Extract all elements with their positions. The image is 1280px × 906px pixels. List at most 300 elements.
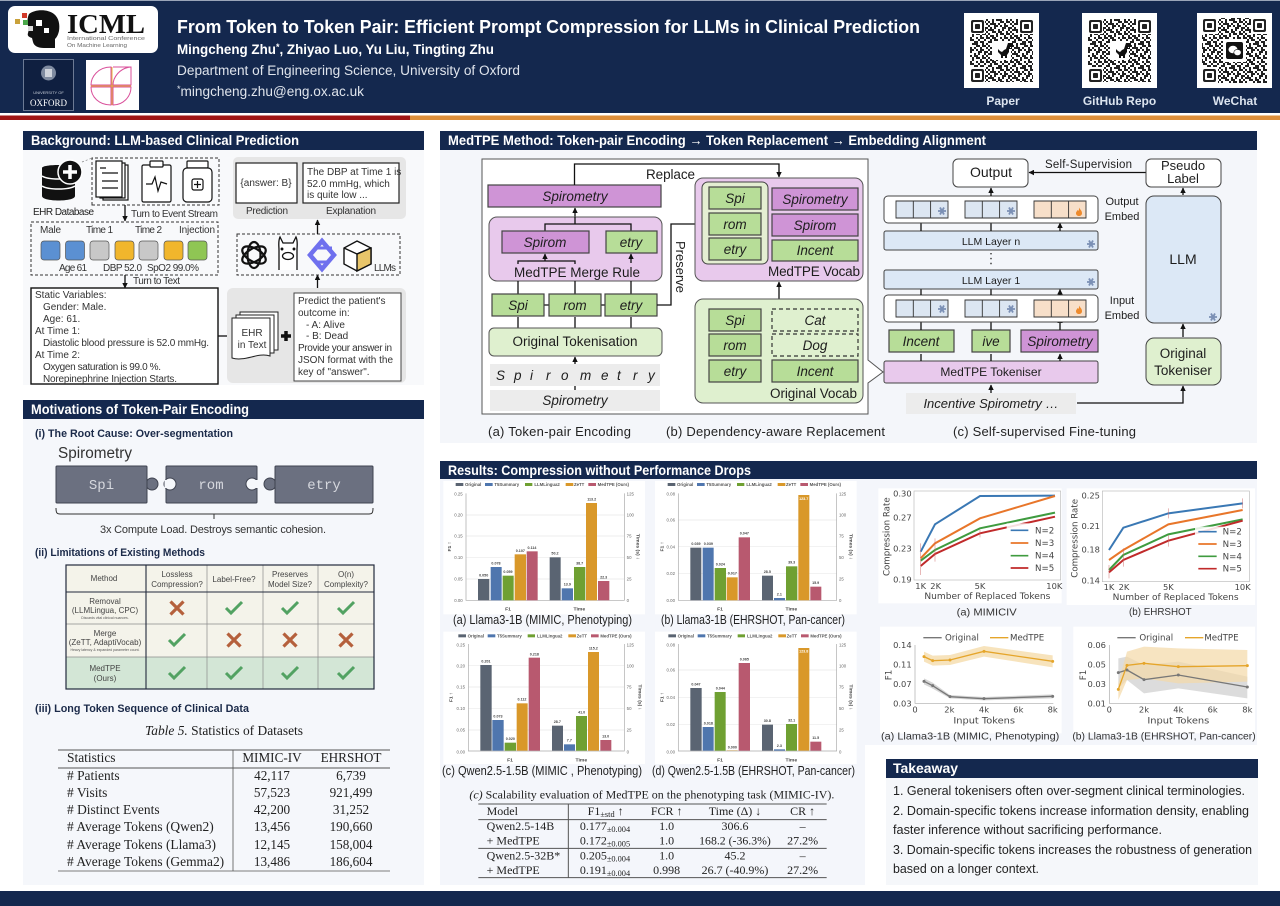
- panel: takeaway: [886, 759, 1258, 885]
- email: mingcheng.zhu@eng.ox.ac.uk: [181, 84, 364, 99]
- puzzle tokens: etry: [307, 478, 341, 494]
- event stream: Time 2: [135, 225, 162, 236]
- logo: University of Oxford: [24, 60, 74, 110]
- bar chart: Qwen EHRSHOT: 0.000: [728, 746, 737, 750]
- bar chart: Llama3 EHRSHOT: 2.1: [777, 592, 782, 596]
- bar chart: Llama3 EHRSHOT: F1: [717, 607, 723, 613]
- LLM layer 1: [884, 270, 1098, 289]
- dataset statistics table: 190,660: [330, 819, 373, 834]
- dataset statistics table: 12,145: [254, 837, 291, 852]
- block: original vocab: Dog: [803, 338, 828, 353]
- heading: method: [440, 131, 1257, 150]
- scalability table: 27.2%: [787, 863, 818, 877]
- block: original vocab: [695, 299, 863, 403]
- block: MedTPE vocab: MedTPE Vocab: [768, 264, 860, 279]
- puzzle tokens: [56, 466, 373, 503]
- line chart: compression rate EHRSHOT: 0.21: [1081, 521, 1100, 531]
- arrow: replace: Replace: [646, 167, 695, 182]
- line chart: compression rate MIMIC-IV: 0.23: [893, 544, 912, 554]
- heading: results: Results: Compression without Performance Drops: [448, 462, 751, 478]
- bar chart: Llama3 MIMIC: 125: [627, 492, 634, 497]
- line chart: compression rate MIMIC-IV: [878, 488, 1063, 619]
- arrow: prompt to LLMs: [316, 275, 318, 288]
- bar chart: Llama3 MIMIC: 0.00: [454, 598, 463, 603]
- legend: T5Summary: [497, 633, 522, 638]
- scalability table: + MedTPE: [487, 833, 540, 847]
- token connectors: [518, 281, 631, 305]
- token row: Spi: [508, 298, 529, 313]
- bar chart: Llama3 EHRSHOT: 39.3: [788, 561, 795, 565]
- legend: LLMLingua2: [747, 633, 773, 638]
- word: Spirometry: Spirometry: [58, 445, 132, 462]
- bar chart: Llama3 EHRSHOT: 0: [839, 598, 842, 603]
- legend: LLMLingua2: [534, 482, 560, 487]
- bar chart: Qwen MIMIC: 0.201: [481, 660, 491, 664]
- bar chart: Llama3 MIMIC: 0.114: [528, 546, 537, 550]
- heading: background: [23, 131, 424, 150]
- scalability table: 0.998: [653, 863, 680, 877]
- legend: Original: [1139, 634, 1173, 644]
- caption: chart d: (d) Qwen2.5-1.5B (EHRSHOT, Pan-cancer): [652, 763, 855, 778]
- LLM block: LLM: [1169, 251, 1197, 267]
- heading: takeaway: [886, 759, 1258, 778]
- line chart: compression rate MIMIC-IV: (a) MIMICIV: [957, 608, 1017, 619]
- bar chart: Qwen MIMIC: 0.020: [506, 737, 515, 741]
- comparison table: Complexity?: [324, 580, 369, 589]
- event stream: Age 61: [59, 263, 87, 274]
- scalability table: ±0.004: [607, 825, 631, 834]
- bar chart: Qwen EHRSHOT: Times (s) ↓: [847, 684, 853, 710]
- line chart: compression rate MIMIC-IV: 10K: [1046, 581, 1063, 591]
- bar chart: Qwen EHRSHOT: 30.8: [764, 719, 771, 723]
- bar chart: Qwen EHRSHOT: 0.08: [667, 642, 676, 647]
- caption: chart a: (a) Llama3-1B (MIMIC, Phenotyping): [453, 612, 632, 627]
- captions: (a) Token-pair Encoding: [488, 424, 631, 439]
- arrow: self-supervision: Self-Supervision: [1045, 159, 1132, 171]
- line chart: F1 Llama3 MIMIC: Input Tokens: [953, 716, 1016, 726]
- legend: ZeTT: [787, 633, 797, 638]
- legend: ZeTT: [786, 482, 797, 487]
- line chart: F1 Llama3 MIMIC: [880, 627, 1062, 742]
- scalability table: Qwen2.5-32B*: [487, 848, 560, 862]
- brace caption: 3x Compute Load. Destroys semantic cohesion.: [100, 524, 326, 536]
- line chart: F1 Llama3 MIMIC: 2k: [944, 705, 955, 715]
- bar chart: Qwen EHRSHOT: 0.065: [740, 658, 749, 662]
- bar chart: Llama3 EHRSHOT: 0.047: [740, 532, 749, 536]
- character strip: [490, 364, 660, 386]
- legend: [1195, 527, 1245, 575]
- original tokeniser: [1146, 338, 1221, 385]
- block: MedTPE vocab: etry: [724, 242, 747, 257]
- frame: encoding and replacement: [482, 159, 883, 414]
- arrow: turn to event stream: Turn to Event Stream: [131, 209, 218, 220]
- output panel: [233, 157, 406, 219]
- prediction box: [236, 163, 297, 217]
- scalability table: 27.2%: [787, 833, 818, 847]
- scalability table: ±0.004: [607, 854, 631, 863]
- icon: EHR in text document: EHR: [241, 328, 263, 339]
- line chart: F1 Llama3 MIMIC: 4k: [979, 705, 989, 715]
- bar chart: Llama3 MIMIC: 0.15: [454, 534, 463, 539]
- icon: EHR database: [33, 160, 94, 218]
- dataset statistics table: # Patients: [67, 768, 120, 783]
- original tokenisation: Original Tokenisation: [512, 334, 638, 349]
- comparison table: (ZeTT, AdaptiVocab): [69, 638, 142, 647]
- block: MedTPE vocab: Spirometry: [782, 192, 849, 207]
- bar chart: Llama3 EHRSHOT: 0.06: [667, 518, 676, 523]
- line chart: compression rate EHRSHOT: 0.25: [1081, 490, 1100, 500]
- arrow: replace: [574, 164, 779, 185]
- bar chart: Qwen EHRSHOT: 0.00: [667, 749, 676, 754]
- bar chart: Qwen MIMIC: 0.112: [518, 698, 526, 702]
- brace: [56, 508, 373, 519]
- block: original vocab: Incent: [797, 364, 835, 379]
- event stream: Male: [40, 225, 61, 236]
- scalability table: CR ↑: [790, 804, 815, 818]
- captions: (b) Dependency-aware Replacement: [666, 424, 885, 439]
- line chart: F1 Llama3 EHRSHOT: [1072, 627, 1256, 742]
- heading: background: Background: LLM-based Clinical Prediction: [31, 132, 299, 148]
- QR labels: Paper: [986, 94, 1020, 108]
- legend: MedTPE (Ours): [600, 633, 632, 638]
- legend: T5Summary: [494, 482, 520, 487]
- bar chart: Llama3 MIMIC: F1 ↑: [447, 542, 453, 552]
- dataset statistics table: 158,004: [330, 837, 373, 852]
- line chart: F1 Llama3 MIMIC: 6k: [1013, 705, 1024, 715]
- EHR text box: At Time 1:: [35, 326, 80, 337]
- line chart: F1 Llama3 MIMIC: 0.11: [893, 659, 912, 669]
- bar chart: Qwen EHRSHOT: F1 ↑: [659, 692, 665, 702]
- bar chart: Llama3 EHRSHOT: Time: [786, 607, 797, 613]
- comparison table: (LLMLingua, CPC): [72, 606, 138, 615]
- scalability table: [469, 788, 834, 878]
- line chart: F1 Llama3 EHRSHOT: 4k: [1173, 705, 1184, 715]
- arrow: turn to text: Turn to Text: [133, 276, 180, 287]
- tokeniser tokens: [889, 330, 1098, 352]
- arrow: text to prompt: [218, 335, 232, 337]
- logo: ICML: On Machine Learning: [67, 43, 127, 49]
- bar chart: Qwen MIMIC: 41.0: [578, 710, 585, 714]
- dataset statistics table: 13,456: [254, 819, 291, 834]
- bar chart: Llama3 EHRSHOT: 0.08: [667, 492, 676, 497]
- bar chart: Llama3 EHRSHOT: 123.7: [799, 497, 808, 501]
- prompt box: Predict the patient's: [298, 296, 386, 307]
- EHR text box: Gender: Male.: [43, 302, 106, 313]
- legend: N=4: [1035, 552, 1055, 562]
- pseudo label: [1146, 158, 1221, 187]
- takeaway text: based on a longer context.: [893, 861, 1039, 876]
- comparison table: Merge: [94, 629, 117, 638]
- legend: MedTPE (Ours): [598, 482, 629, 487]
- dataset statistics table: Statistics: [67, 750, 116, 765]
- line chart: compression rate MIMIC-IV: 2K: [930, 581, 942, 591]
- LLM layer 1: LLM Layer 1: [962, 275, 1020, 287]
- line chart: F1 Llama3 MIMIC: 0.03: [893, 698, 912, 708]
- bar chart: Qwen EHRSHOT: 0.04: [667, 695, 676, 700]
- prediction box: {answer: B}: [240, 178, 292, 189]
- QR labels: WeChat: [1213, 94, 1257, 108]
- legend: [456, 482, 629, 487]
- legend: LLMLingua2: [537, 633, 563, 638]
- logo: ICML: ICML: [67, 9, 145, 39]
- panel: background: [23, 131, 424, 385]
- bar chart: Qwen EHRSHOT: 123.8: [799, 650, 808, 654]
- bar chart: Llama3 EHRSHOT: 75: [839, 534, 844, 539]
- legend: Original: [468, 633, 484, 638]
- icon: clinical notes: [96, 161, 128, 200]
- authors: Mingcheng Zhu: [177, 42, 277, 57]
- block: MedTPE vocab: rom: [723, 217, 747, 232]
- takeaway text: 2. Domain-specific tokens increase information density, enabling: [893, 803, 1249, 818]
- legend: ZeTT: [577, 633, 587, 638]
- pseudo label: Pseudo: [1161, 158, 1205, 173]
- line chart: F1 Llama3 EHRSHOT: 0.05: [1087, 659, 1106, 669]
- original tokeniser: Original: [1160, 346, 1206, 361]
- line chart: compression rate EHRSHOT: Compression Rate: [1070, 499, 1080, 578]
- takeaway text: 3. Domain-specific tokens increases the robustness of generation: [893, 842, 1252, 857]
- bar chart: Llama3 MIMIC: 50.2: [551, 552, 559, 556]
- legend: [668, 633, 842, 638]
- line chart: F1 Llama3 EHRSHOT: 2k: [1139, 705, 1149, 715]
- event stream: SpO2 99.0%: [147, 263, 199, 274]
- takeaway text: faster inference without sacrificing performance.: [893, 822, 1162, 837]
- prompt box: outcome in:: [298, 308, 350, 319]
- legend: MedTPE (Ours): [810, 482, 841, 487]
- heading: takeaway: Takeaway: [893, 760, 958, 776]
- dataset statistics table: # Visits: [67, 785, 107, 800]
- icon: EHR in text document: [232, 312, 278, 359]
- authors: *: [276, 42, 280, 52]
- comparison table: (Ours): [94, 674, 117, 683]
- bar chart: Qwen MIMIC: 0.20: [457, 663, 466, 668]
- character strip: Spirometry: [496, 368, 656, 383]
- input text strip: Incentive Spirometry …: [923, 396, 1059, 411]
- bar chart: Llama3 MIMIC: 0: [627, 598, 630, 603]
- scalability table: 1.0: [659, 848, 674, 862]
- dataset statistics table: # Average Tokens (Qwen2): [67, 819, 214, 834]
- merge rule: etry: [620, 235, 643, 250]
- bar chart: Llama3 EHRSHOT: 0.039: [691, 542, 701, 546]
- bar chart: Llama3 EHRSHOT: Times (s) ↓: [847, 534, 853, 560]
- block: MedTPE vocab: Incent: [797, 243, 835, 258]
- bar chart: Llama3 MIMIC: [443, 481, 645, 614]
- heading: results: [440, 461, 1257, 479]
- bar chart: Qwen MIMIC: 0.10: [457, 706, 466, 711]
- bar chart: Qwen EHRSHOT: 0.018: [704, 722, 713, 726]
- bar chart: Qwen EHRSHOT: 25: [839, 728, 844, 733]
- icon: Qwen: [310, 241, 334, 269]
- bar chart: Llama3 MIMIC: 0.20: [454, 513, 463, 518]
- EHR text box: Static Variables:: [35, 290, 107, 301]
- bar chart: Qwen MIMIC: 0.00: [457, 749, 466, 754]
- prompt box: Provide your answer in: [298, 343, 392, 354]
- LLMs dashed box: LLMs: [374, 263, 396, 274]
- scalability table: ±std: [600, 810, 615, 819]
- line chart: F1 Llama3 MIMIC: (a) Llama3-1B (MIMIC, Phenotyping): [881, 731, 1059, 742]
- merged token: Spirometry: [542, 189, 609, 204]
- bar chart: Qwen MIMIC: [443, 632, 645, 764]
- line chart: F1 Llama3 EHRSHOT: F1: [1079, 670, 1089, 680]
- line chart: compression rate MIMIC-IV: Number of Replaced Tokens: [924, 592, 1051, 602]
- original tokenisation: [489, 328, 662, 356]
- caption: chart c: (c) Qwen2.5-1.5B (MIMIC , Phenotyping): [442, 763, 642, 778]
- legend: [923, 634, 1044, 644]
- scalability table: ↑: [615, 804, 624, 818]
- line chart: F1 Llama3 EHRSHOT: 0.03: [1087, 679, 1106, 689]
- bar chart: Llama3 MIMIC: 50: [627, 555, 632, 560]
- line chart: F1 Llama3 MIMIC: 0: [912, 705, 918, 715]
- scalability table: 45.2: [725, 848, 745, 862]
- bar chart: Llama3 MIMIC: 113.2: [587, 498, 596, 502]
- legend: MedTPE: [1204, 634, 1239, 644]
- block: MedTPE vocab: Spi: [725, 191, 746, 206]
- dataset statistics table: # Distinct Events: [67, 802, 160, 817]
- line chart: F1 Llama3 EHRSHOT: 0.06: [1087, 640, 1106, 650]
- EHR text box: Norepinephrine Injection Starts.: [43, 374, 177, 385]
- affiliation: Department of Engineering Science, University of Oxford: [177, 63, 520, 78]
- comparison table: Model Size?: [268, 580, 313, 589]
- block: original vocab: Spi: [725, 313, 746, 328]
- LLM layer n: LLM Layer n: [962, 236, 1020, 248]
- scalability table: 1.0: [659, 819, 674, 833]
- comparison table: Label-Free?: [212, 575, 256, 584]
- legend: Original: [677, 482, 693, 487]
- line chart: compression rate EHRSHOT: 0.14: [1081, 576, 1100, 586]
- heading: motivations: Motivations of Token-Pair Encoding: [31, 401, 249, 417]
- bar chart: Qwen MIMIC: 100: [627, 663, 634, 668]
- bar chart: Llama3 EHRSHOT: 0.04: [667, 544, 676, 549]
- input embed: [884, 295, 1139, 322]
- output box: Output: [970, 164, 1012, 180]
- EHR text box: [31, 288, 218, 385]
- comparison table: Preserves: [272, 570, 308, 579]
- event stream: DBP 52.0: [103, 263, 142, 274]
- scalability table: FCR ↑: [651, 804, 682, 818]
- bar chart: Llama3 MIMIC: 0.050: [479, 573, 488, 577]
- input text strip: [906, 393, 1076, 414]
- token row: [492, 294, 657, 316]
- bar chart: Qwen EHRSHOT: 0.047: [691, 683, 701, 687]
- bar chart: Llama3 EHRSHOT: 0.017: [728, 572, 737, 576]
- line chart: compression rate EHRSHOT: Number of Replaced Tokens: [1113, 593, 1239, 603]
- line chart: compression rate MIMIC-IV: 0.30: [893, 489, 912, 499]
- table caption: Table 5. Statistics of Datasets: [145, 723, 303, 738]
- legend: N=3: [1035, 539, 1054, 549]
- token row: rom: [563, 298, 587, 313]
- scalability table: 0.191: [580, 863, 607, 877]
- bar chart: Qwen EHRSHOT: 100: [839, 663, 847, 668]
- explanation box: 52.0 mmHg, which: [307, 179, 390, 190]
- prompt box: [294, 293, 401, 381]
- comparison table: Heavy latency & expanded parameter count.: [70, 648, 140, 652]
- email: *: [177, 84, 181, 94]
- bar chart: Llama3 MIMIC: 0.10: [454, 555, 463, 560]
- dataset statistics table: 186,604: [330, 854, 373, 869]
- comparison table: O(n): [338, 570, 354, 579]
- scalability table: –: [799, 819, 807, 833]
- scalability table: Model: [487, 804, 519, 818]
- bar chart: Llama3 MIMIC: 0.25: [454, 492, 463, 497]
- scalability table: –: [799, 848, 807, 862]
- scalability table: ±0.005: [607, 839, 630, 848]
- dataset statistics table: 921,499: [330, 785, 373, 800]
- bar chart: Llama3 MIMIC: 75: [627, 534, 632, 539]
- legend: N=2: [1223, 528, 1242, 538]
- line chart: compression rate EHRSHOT: 0.18: [1081, 544, 1100, 554]
- line chart: compression rate EHRSHOT: 2K: [1119, 582, 1130, 592]
- bar chart: Llama3 EHRSHOT: 0.00: [667, 598, 676, 603]
- authors: , Zhiyao Luo, Yu Liu, Tingting Zhu: [279, 42, 494, 57]
- comparison table: [66, 565, 374, 689]
- header band: [0, 0, 1280, 120]
- explanation box: is quite low ...: [307, 190, 368, 201]
- bar chart: Llama3 EHRSHOT: 0.024: [716, 562, 726, 566]
- explanation box: [303, 163, 401, 217]
- bar chart: Qwen MIMIC: 0.073: [493, 714, 503, 718]
- line chart: F1 Llama3 MIMIC: 0.14: [893, 640, 912, 650]
- bar chart: Qwen MIMIC: F1 ↑: [449, 692, 455, 702]
- EHR text box: Diastolic blood pressure is 52.0 mmHg.: [43, 338, 209, 349]
- comparison table: Removal: [89, 597, 121, 606]
- bar chart: Qwen MIMIC: 0.15: [457, 685, 466, 690]
- scalability table: 1.0: [659, 833, 674, 847]
- block: MedTPE vocab: [695, 178, 863, 281]
- bar chart: Qwen EHRSHOT: 0: [839, 749, 842, 754]
- subheading: long sequences: (iii) Long Token Sequence of Clinical Data: [35, 703, 250, 715]
- scalability table: 0.172: [580, 833, 607, 847]
- icon: plus: [281, 331, 291, 341]
- merge rule: [489, 217, 662, 281]
- legend: Original: [945, 634, 979, 644]
- line chart: compression rate EHRSHOT: 1K: [1104, 582, 1115, 592]
- bar chart: Llama3 MIMIC: 25: [627, 577, 632, 582]
- legend: [1117, 634, 1239, 644]
- scalability table: 0.177: [580, 819, 607, 833]
- bar chart: Qwen MIMIC: 0: [627, 749, 630, 754]
- logo: University of Oxford: UNIVERSITY OF: [33, 90, 64, 95]
- line chart: F1 Llama3 EHRSHOT: 0: [1107, 705, 1112, 715]
- logo: University of Oxford: OXFORD: [30, 98, 67, 108]
- block: MedTPE vocab: Spirom: [794, 218, 836, 233]
- dataset statistics table: 13,486: [254, 854, 291, 869]
- bar chart: Qwen EHRSHOT: Time: [786, 757, 797, 763]
- QR code: GitHub: [1082, 13, 1157, 88]
- line chart: F1 Llama3 MIMIC: 0.07: [893, 679, 912, 689]
- block: original vocab: Original Vocab: [770, 386, 857, 401]
- bar chart: Qwen MIMIC: 7.7: [567, 739, 572, 743]
- output embed: Output: [1105, 196, 1139, 208]
- bar chart: Llama3 MIMIC: Times (s) ↓: [635, 534, 641, 560]
- block: original vocab: Cat: [804, 313, 827, 328]
- output embed: [884, 196, 1139, 223]
- dataset statistics table: 42,117: [254, 768, 290, 783]
- legend: N=5: [1223, 565, 1242, 575]
- dataset statistics table: 31,252: [333, 802, 369, 817]
- panel: results: [440, 461, 1280, 891]
- icon: medication bottle: [183, 161, 212, 202]
- legend: [458, 633, 632, 638]
- legend: Original: [678, 633, 694, 638]
- arrow: preserve: [657, 224, 701, 305]
- bar chart: Qwen EHRSHOT: 32.1: [788, 718, 795, 722]
- scalability table: 0.205: [580, 848, 607, 862]
- event stream: Time 1: [86, 225, 113, 236]
- line chart: F1 Llama3 MIMIC: 8k: [1048, 705, 1058, 715]
- EHR text box: Age: 61.: [43, 314, 80, 325]
- tokeniser tokens: ive: [982, 334, 1000, 349]
- dataset statistics table: MIMIC-IV: [242, 750, 302, 765]
- event sources dashed box: [82, 158, 219, 205]
